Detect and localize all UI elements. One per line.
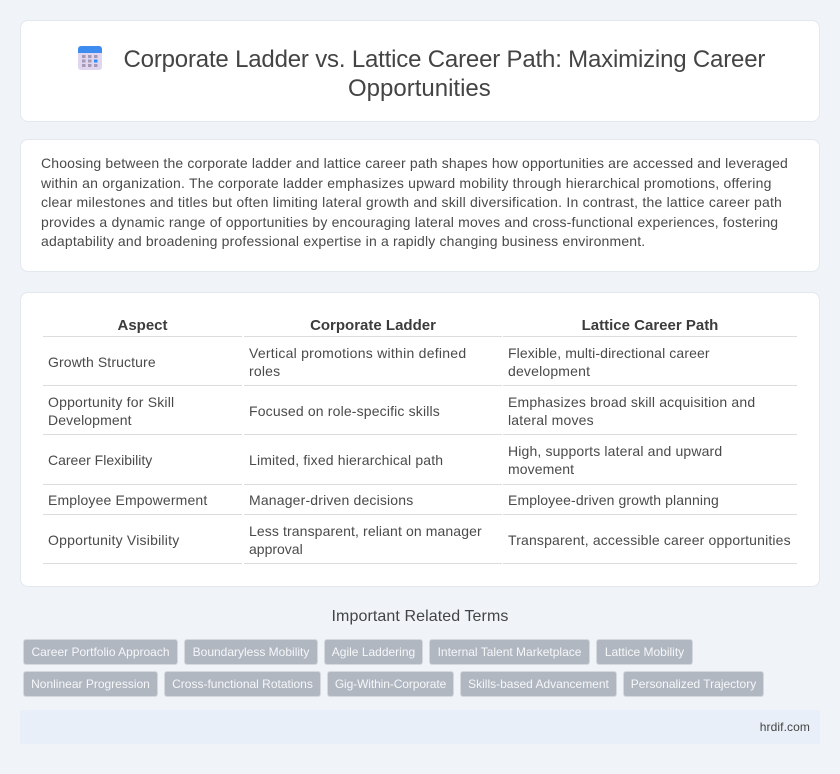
- term tags: Agile Laddering: [332, 645, 415, 659]
- row: skill development: lateral moves: [508, 412, 594, 428]
- term tags: [23, 639, 764, 697]
- term tags: Nonlinear Progression: [31, 677, 150, 691]
- row: skill development: Opportunity for Skill: [48, 394, 174, 410]
- intro text: provides a dynamic range of opportunities by encouraging lateral moves and cross-functional experiences, fostering: [41, 214, 778, 230]
- title: [124, 46, 765, 102]
- table header: lattice career path: Lattice Career Path: [582, 317, 718, 334]
- row: career flexibility: movement: [508, 461, 574, 477]
- row: opportunity visibility: Transparent, accessible career opportunities: [508, 532, 791, 548]
- row: growth structure: development: [508, 363, 590, 379]
- term tags: Gig-Within-Corporate: [335, 677, 446, 691]
- intro text: within an organization. The corporate ladder emphasizes upward mobility through hierarchical promotions, offering: [41, 174, 772, 190]
- title: Opportunities: [348, 75, 491, 102]
- header card: [20, 20, 820, 122]
- row: skill development: Emphasizes broad skill acquisition and: [508, 394, 755, 410]
- row: growth structure: Growth Structure: [48, 354, 156, 370]
- intro text: Choosing between the corporate ladder and lattice career path shapes how opportunities are accessed and leveraged: [41, 155, 788, 171]
- row: career flexibility: High, supports lateral and upward: [508, 443, 722, 459]
- row: growth structure: [48, 345, 710, 379]
- row: career flexibility: Limited, fixed hierarchical path: [249, 452, 443, 468]
- row: skill development: Focused on role-specific skills: [249, 403, 440, 419]
- row: opportunity visibility: approval: [249, 541, 303, 557]
- intro panel: [20, 139, 820, 272]
- term tags: Career Portfolio Approach: [31, 645, 170, 659]
- term tags: Internal Talent Marketplace: [438, 645, 581, 659]
- row: employee empowerment: Employee Empowerment: [48, 492, 207, 508]
- comparison table panel: [20, 292, 820, 587]
- row: career flexibility: Career Flexibility: [48, 452, 152, 468]
- icon: calendar: [78, 46, 102, 70]
- row: career flexibility: [48, 443, 722, 477]
- intro text: clear milestones and titles but often limiting lateral growth and skill diversification. In contrast, the lattice career path: [41, 194, 782, 210]
- row: skill development: [48, 394, 755, 428]
- term tags: Lattice Mobility: [605, 645, 684, 659]
- term tags: Skills-based Advancement: [468, 677, 609, 691]
- row: employee empowerment: Manager-driven decisions: [249, 492, 413, 508]
- row: opportunity visibility: Opportunity Visibility: [48, 532, 179, 548]
- row: growth structure: roles: [249, 363, 280, 379]
- row: opportunity visibility: [48, 523, 791, 557]
- table header: corporate ladder: Corporate Ladder: [310, 317, 436, 334]
- intro text: adaptability and broadening professional expertise in a rapidly changing business environment.: [41, 233, 645, 249]
- row: growth structure: Vertical promotions within defined: [249, 345, 466, 361]
- row: growth structure: Flexible, multi-directional career: [508, 345, 710, 361]
- related terms heading: Important Related Terms: [332, 608, 508, 625]
- term tags: Personalized Trajectory: [631, 677, 756, 691]
- intro text: [41, 155, 788, 249]
- term tags: Cross-functional Rotations: [172, 677, 313, 691]
- row: employee empowerment: [48, 492, 719, 508]
- footer bar: [20, 710, 820, 744]
- row: skill development: Development: [48, 412, 132, 428]
- footer source: hrdif.com: [760, 720, 810, 734]
- row: opportunity visibility: Less transparent, reliant on manager: [249, 523, 482, 539]
- table header: aspect: Aspect: [117, 317, 168, 334]
- title: Corporate Ladder vs. Lattice Career Path: Maximizing Career: [124, 46, 765, 73]
- term tags: Boundaryless Mobility: [193, 645, 309, 659]
- row: employee empowerment: Employee-driven growth planning: [508, 492, 719, 508]
